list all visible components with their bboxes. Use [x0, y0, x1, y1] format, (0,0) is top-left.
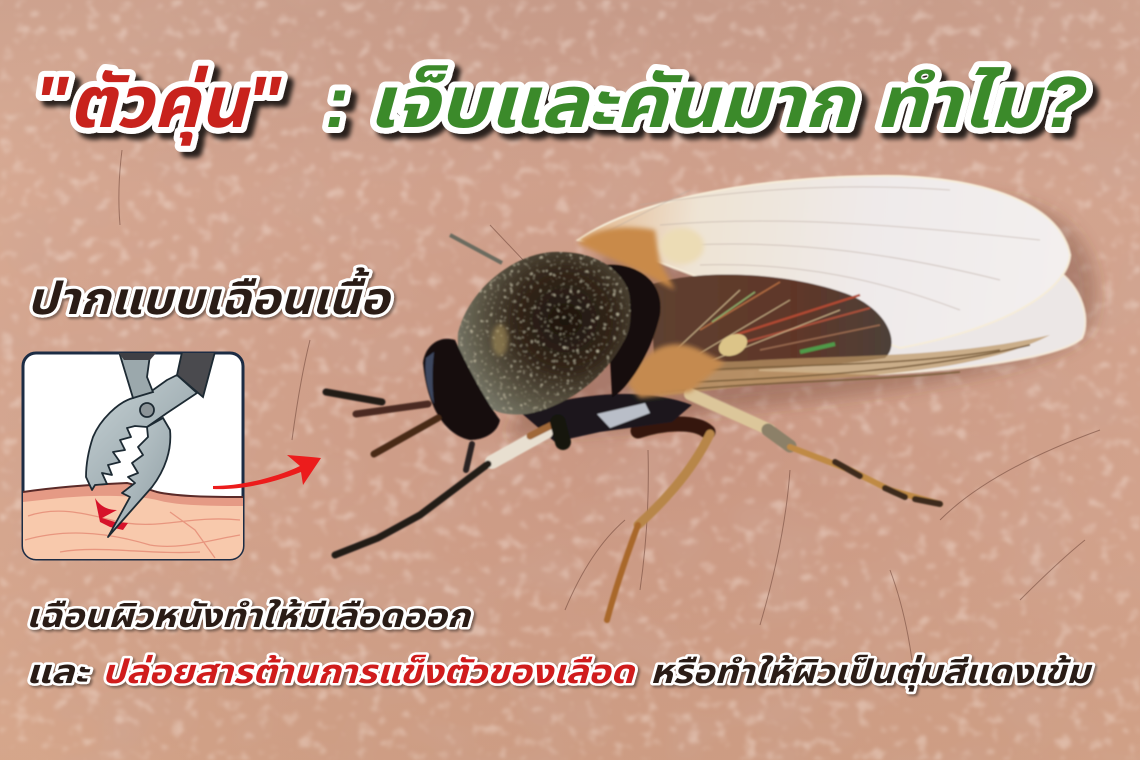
pivot: [140, 403, 154, 417]
panel frame: [23, 353, 243, 559]
title part: red: "ตัวคุ่น": [34, 63, 282, 146]
orange thorax tuft: [628, 344, 725, 398]
title part: colon: :: [325, 63, 349, 143]
head: [423, 339, 500, 440]
skin lines: [25, 511, 240, 558]
skin layer: [23, 496, 243, 559]
pale abdomen spot: [715, 330, 751, 360]
thorax gold highlight: [492, 324, 508, 356]
abdomen: [650, 275, 892, 372]
description line 2 start: และ: [26, 653, 91, 690]
description text: [26, 597, 1093, 692]
head sheen: [425, 352, 434, 404]
front wing: [578, 176, 1070, 348]
rear wing: [760, 266, 1085, 374]
inset panel: biting mouthparts: [23, 352, 243, 560]
pale wing spot: [660, 228, 704, 264]
rear antenna: [450, 235, 502, 263]
orange wing base: [577, 227, 675, 290]
blood: [95, 498, 128, 530]
description line 2 highlight: ปล่อยสารต้านการแข็งตัวของเลือด: [102, 653, 636, 690]
scutum edge: [605, 265, 661, 398]
vein bundle: [640, 335, 1050, 396]
thorax: [458, 252, 631, 414]
description line 1: เฉือนผิวหนังทำให้มีเลือดออก: [26, 597, 472, 634]
description line 2 end: หรือทำให้ผิวเป็นตุ่มสีแดงเข้ม: [650, 653, 1093, 692]
fly shadow: [506, 190, 1096, 438]
upper jaw: [86, 375, 197, 490]
middle leg: [607, 424, 710, 620]
dark handle: [177, 352, 215, 397]
title: [34, 63, 1088, 146]
front leg: [335, 422, 563, 555]
upper arm: [120, 355, 153, 398]
arrow: red pointer to the fly: [213, 455, 321, 489]
lower thorax: [520, 394, 692, 442]
subheading: biting mouthparts: ปากแบบเฉือนเนื้อ: [27, 267, 392, 324]
title part: green: เจ็บและคันมาก ทำไม?: [368, 63, 1088, 143]
mouth parts: [326, 392, 438, 454]
lower jaw: [108, 418, 170, 537]
wing veins: [590, 187, 1040, 310]
fly: [326, 176, 1096, 620]
hind leg: [690, 394, 940, 504]
abdomen hairs and iridescent bands: [665, 282, 880, 365]
